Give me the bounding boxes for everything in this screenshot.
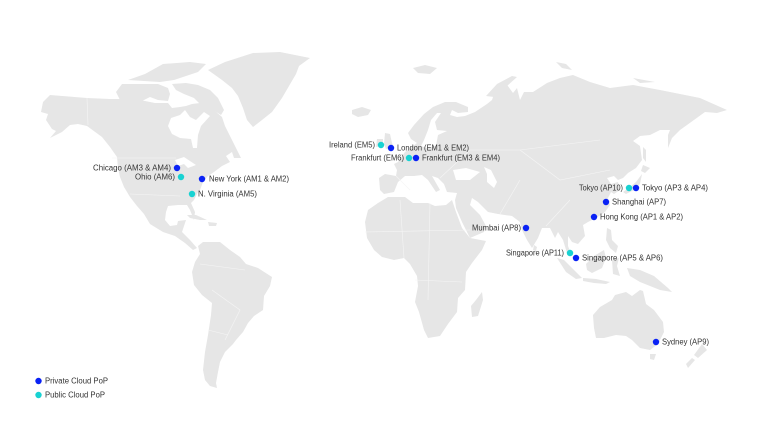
world map [41,52,727,388]
marker: Frankfurt EM3 and EM4: Frankfurt (EM3 & EM4) [422,154,500,162]
madagascar [471,292,483,317]
british isles and iceland [384,133,394,149]
north america [41,95,241,250]
marker: Frankfurt EM6: Frankfurt (EM6) [351,154,404,162]
africa [365,197,486,338]
eurasia [379,75,727,254]
marker: New York: New York (AM1 & AM2) [209,174,289,184]
marker: Singapore AP5 and AP6: Singapore (AP5 & AP6) [582,254,663,262]
australia [593,290,664,350]
legend: private cloud: Private Cloud PoP [45,376,108,386]
legend [35,376,108,400]
marker: London: London (EM1 & EM2) [397,144,469,152]
japan and sakhalin [643,147,646,162]
marker: Chicago: Chicago (AM3 & AM4) [93,164,171,172]
marker: Singapore AP11: Singapore (AP11) [506,248,564,258]
marker: Tokyo AP10: Tokyo (AP10) [579,184,623,192]
greenland [208,52,310,127]
south america [192,242,272,388]
marker: Mumbai: Mumbai (AP8) [472,224,521,232]
legend: public cloud: Public Cloud PoP [45,390,105,400]
marker: Tokyo AP3 and AP4: Tokyo (AP3 & AP4) [642,184,708,192]
marker: Hong Kong: Hong Kong (AP1 & AP2) [600,212,683,222]
marker: N. Virginia: N. Virginia (AM5) [198,190,257,198]
marker: Ireland: Ireland (EM5) [329,140,375,150]
marker: Sydney: Sydney (AP9) [662,338,709,346]
arctic islands [116,84,170,101]
arctic russia islands [413,65,437,74]
caribbean islands [187,215,207,220]
marker: Shanghai: Shanghai (AP7) [612,198,666,206]
marker: Ohio: Ohio (AM6) [135,172,175,182]
southeast asia islands [557,258,582,279]
